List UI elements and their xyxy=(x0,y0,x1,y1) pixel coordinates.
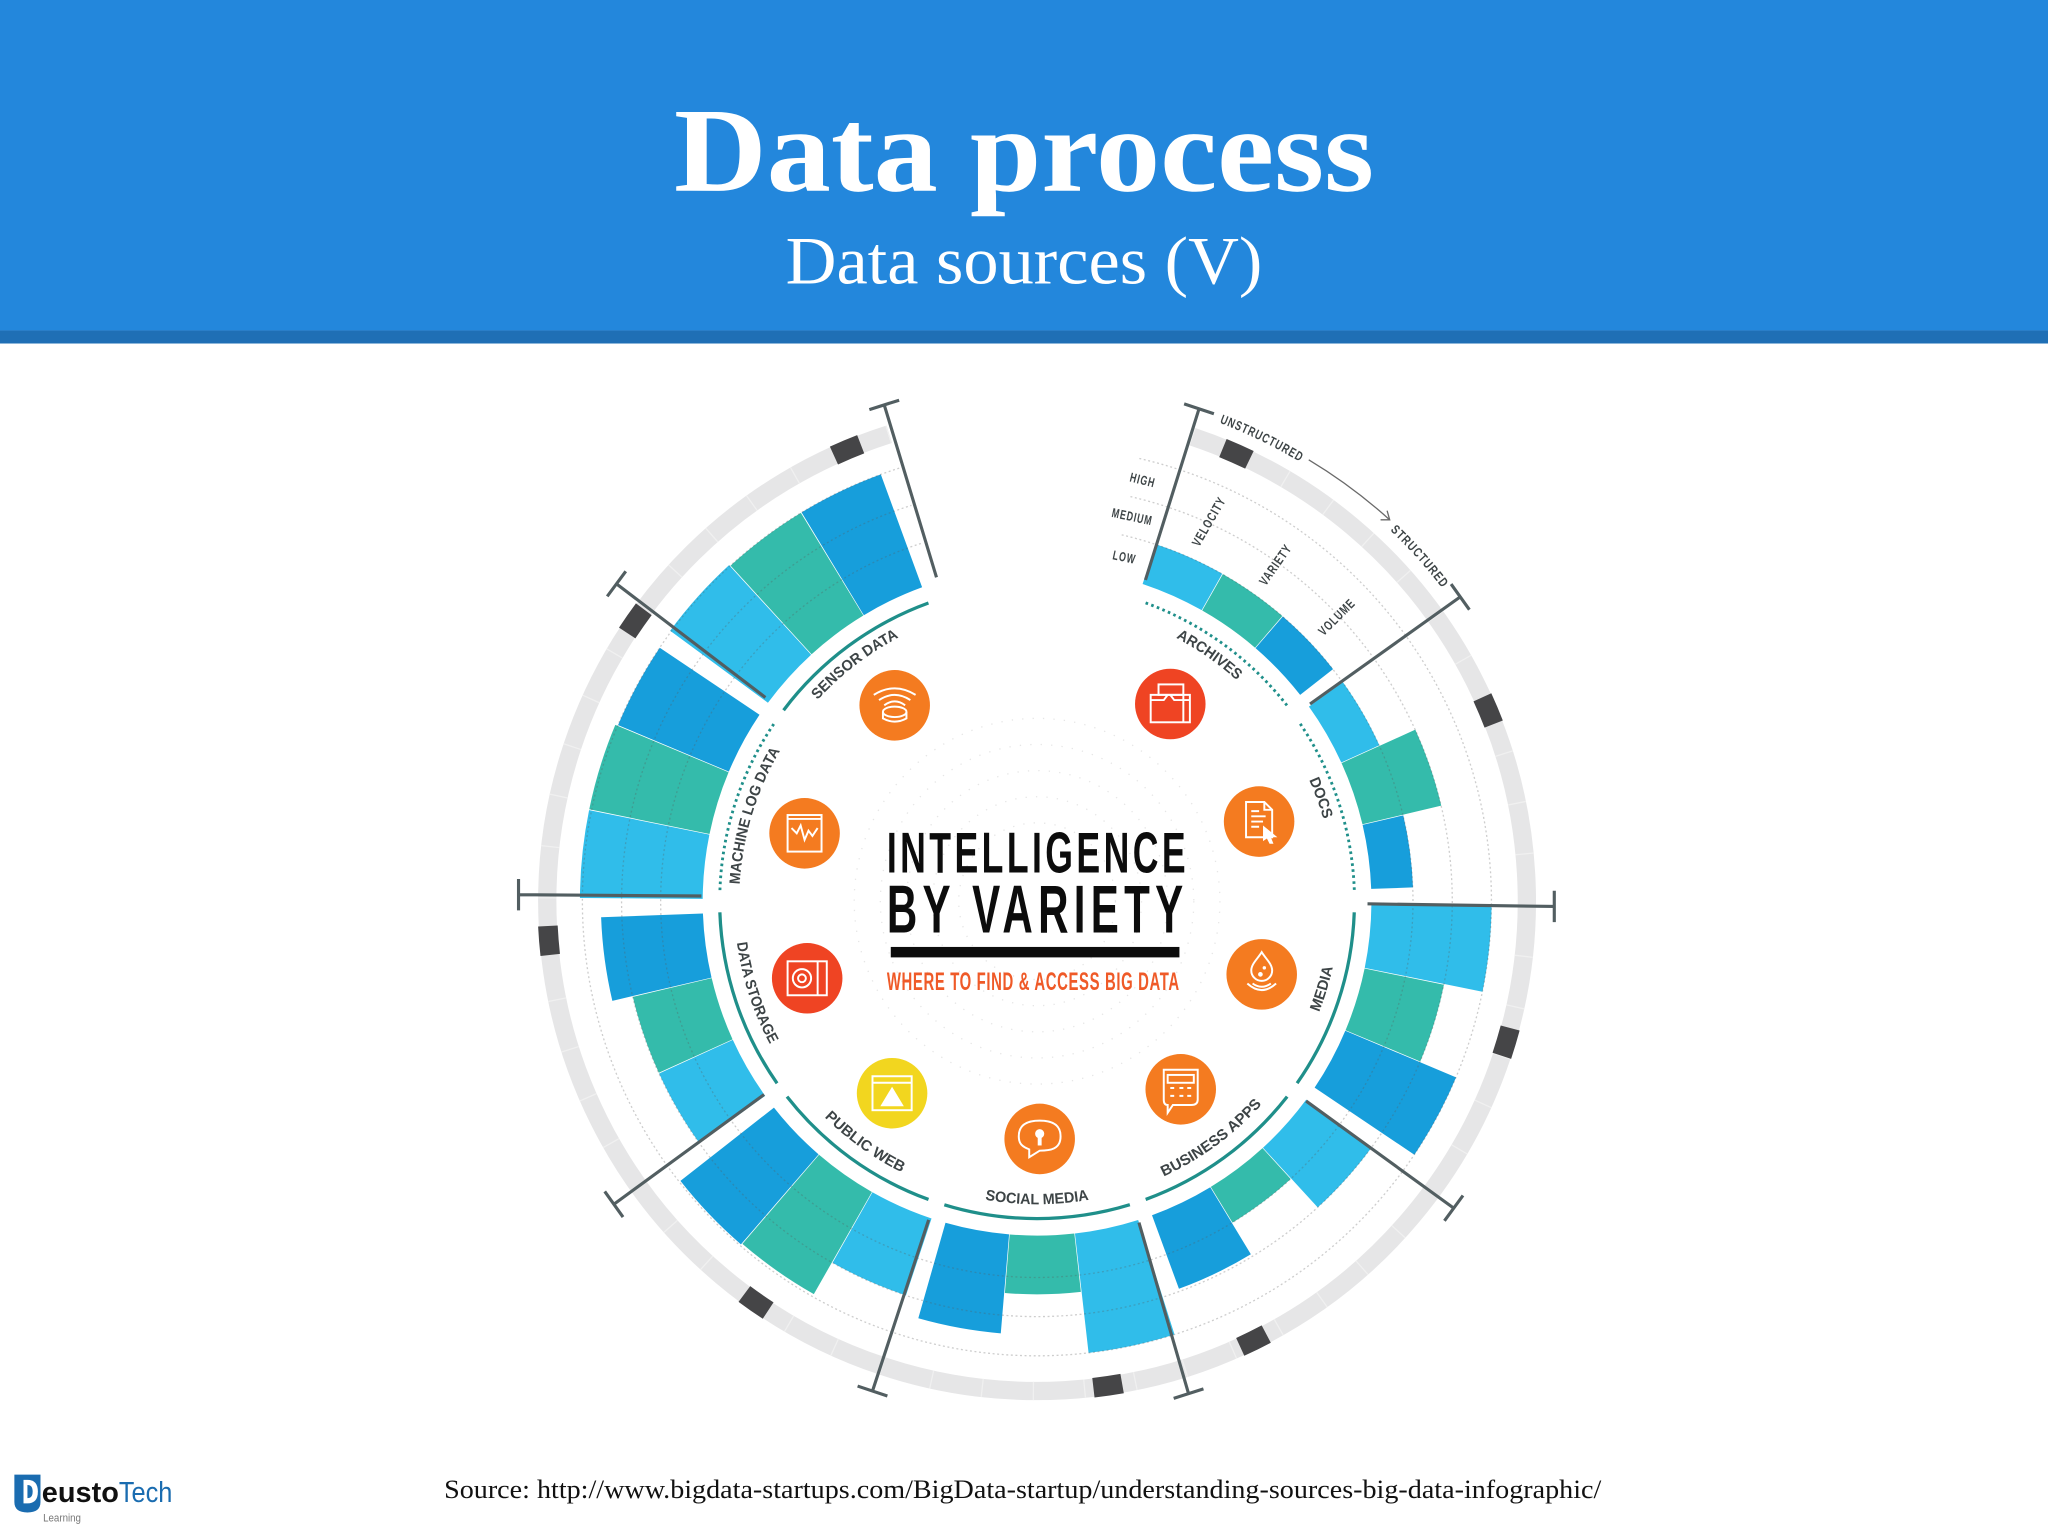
legend: axis labels: HIGH xyxy=(1128,471,1157,491)
category labels xyxy=(729,630,1333,1204)
icon: social media xyxy=(1004,1104,1075,1174)
icon: machine log data xyxy=(769,798,840,869)
bars: docs xyxy=(541,405,1533,1397)
bars: sensor data xyxy=(480,344,1594,1458)
bars: archives xyxy=(536,400,1538,1402)
category labels: BUSINESS APPS xyxy=(1160,1099,1260,1176)
center heading: WHERE TO FIND & ACCESS BIG DATA xyxy=(887,968,1179,996)
inner category arcs xyxy=(592,456,1483,1347)
dotted level rings xyxy=(582,458,1491,1356)
category labels: SENSOR DATA xyxy=(812,630,898,698)
category labels: ARCHIVES xyxy=(1176,630,1242,679)
center heading: INTELLIGENCE xyxy=(887,822,1186,886)
bars: social media xyxy=(542,406,1532,1396)
icon: business apps xyxy=(1145,1054,1216,1125)
bars: machine log data xyxy=(521,385,1554,1418)
legend: axis labels: LOW xyxy=(1111,549,1137,567)
bars: public web xyxy=(482,346,1592,1457)
category labels: PUBLIC WEB xyxy=(825,1110,904,1171)
logo: DeustoTech Learning xyxy=(14,1475,172,1525)
ring position markers xyxy=(359,223,1715,1536)
center heading xyxy=(887,822,1186,996)
icon: media xyxy=(1226,939,1297,1010)
subtitle: Data sources (V) xyxy=(786,222,1262,298)
icon: archives xyxy=(1135,669,1206,739)
category labels: MEDIA xyxy=(1310,968,1333,1012)
legend: axis labels: VELOCITY xyxy=(1190,495,1229,549)
source citation: Source: http://www.bigdata-startups.com/BigData-startup/understanding-sources-big-data-infographic/ xyxy=(444,1474,1602,1504)
category labels: DATA STORAGE xyxy=(737,942,779,1044)
bars: data storage xyxy=(514,378,1560,1424)
header band xyxy=(0,0,2048,344)
logo: DeustoTech Learning: eusto xyxy=(42,1477,119,1509)
legend: axis labels: MEDIUM xyxy=(1110,506,1154,529)
logo: DeustoTech Learning: Tech xyxy=(119,1477,172,1509)
legend: structure scale: STRUCTURED xyxy=(1391,525,1448,586)
category labels: SOCIAL MEDIA xyxy=(986,1190,1089,1204)
legend: structure scale: UNSTRUCTURED xyxy=(1220,414,1302,460)
bars: business apps xyxy=(513,377,1561,1425)
legend: axis labels: VOLUME xyxy=(1316,597,1359,639)
icon: docs xyxy=(1224,786,1294,857)
icon: data storage xyxy=(772,943,842,1014)
category labels: DOCS xyxy=(1310,776,1332,818)
center faint dot pattern xyxy=(854,718,1220,1084)
title: Data process xyxy=(674,84,1374,217)
category labels: MACHINE LOG DATA xyxy=(729,749,780,884)
legend: structure scale xyxy=(1220,414,1448,586)
bars: media xyxy=(521,385,1554,1418)
sector divider T-lines xyxy=(519,400,1554,1398)
icon: sensor data xyxy=(859,670,930,741)
legend: axis labels xyxy=(1110,471,1359,639)
outer gray ring xyxy=(418,282,1656,1521)
center heading: BY VARIETY xyxy=(887,871,1183,947)
logo: DeustoTech Learning: Learning xyxy=(43,1513,81,1525)
icon: public web xyxy=(857,1058,927,1128)
legend: axis labels: VARIETY xyxy=(1257,542,1295,588)
